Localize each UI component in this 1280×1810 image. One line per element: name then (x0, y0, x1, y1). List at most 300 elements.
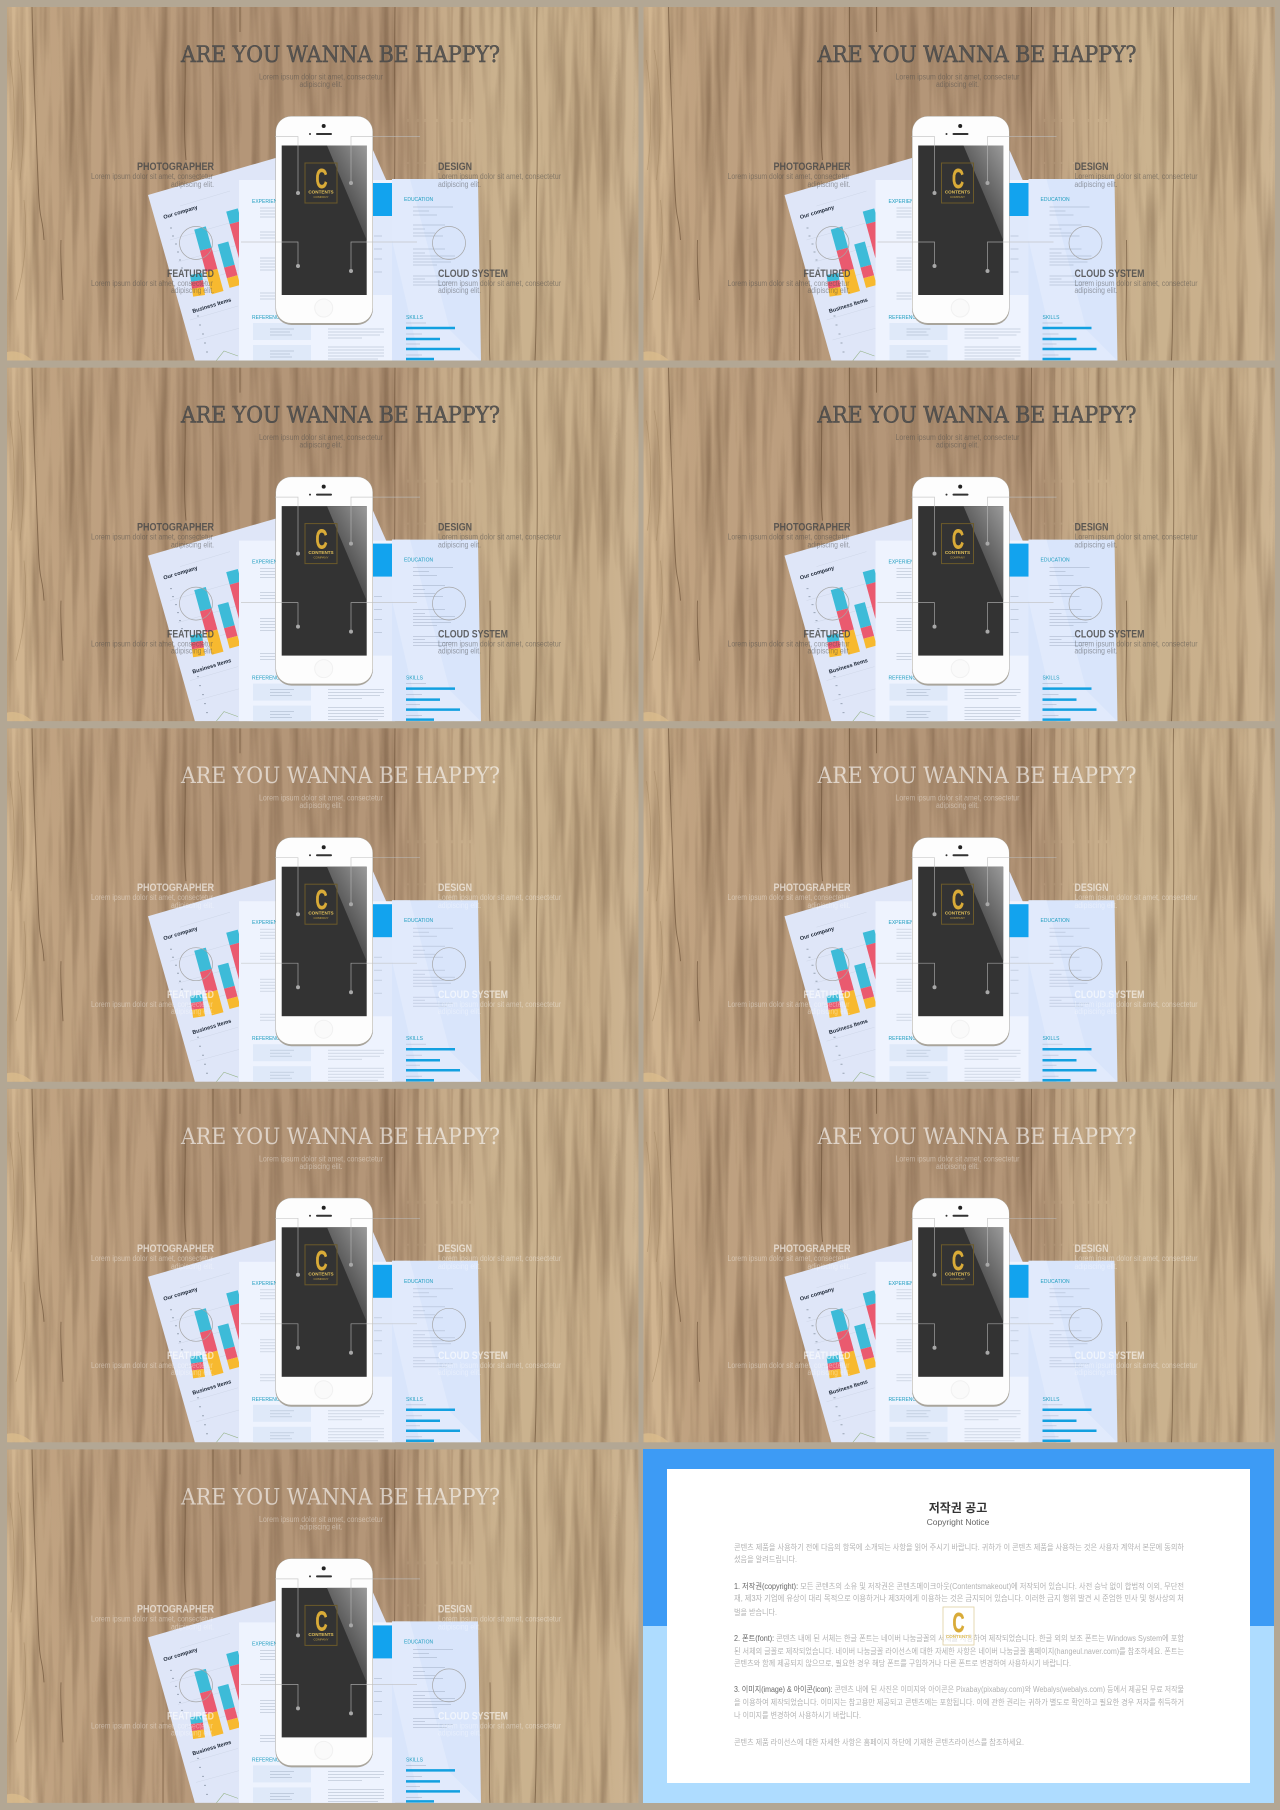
block: design: DESIGN (438, 161, 472, 173)
block: photographer: PHOTOGRAPHER (774, 882, 851, 894)
paper headings: REFERENCES (252, 1397, 287, 1403)
subtitle: Lorem ipsum dolor sit amet, consectetur (896, 72, 1020, 82)
wood background (7, 1089, 639, 1443)
block: cloud system: Lorem ipsum dolor sit amet, consectetur (438, 279, 561, 288)
block: design (438, 161, 561, 189)
phone logo: C (952, 524, 964, 555)
block: photographer: Lorem ipsum dolor sit amet, consectetur (91, 533, 213, 542)
phone logo: CONTENTS (945, 190, 970, 194)
phone (912, 837, 1010, 1046)
block: photographer (728, 522, 851, 550)
paper headings: REFERENCES (252, 1757, 287, 1763)
block: cloud system: adipiscing elit. (1074, 647, 1118, 656)
block: photographer: Lorem ipsum dolor sit amet, consectetur (91, 1614, 213, 1623)
phone logo: CONTENTS (308, 190, 334, 194)
block: featured: adipiscing elit. (808, 1007, 850, 1016)
title: ARE YOU WANNA BE HAPPY? (817, 764, 1136, 789)
section 2 font: 2. 폰트(font): 콘텐츠 내에 된 서체는 한글 폰트는 네이버 나눔글꼴의 서체를 사용하여 제작되었습니다. 한글 외의 보조 폰트는 Windows System에 포함 (734, 1633, 1185, 1643)
block: featured: FEATURED (167, 989, 214, 1001)
paper headings: EXPERIENCE (252, 920, 285, 926)
block: design (1074, 882, 1198, 910)
paper documents (148, 1574, 481, 1803)
block: cloud system: CLOUD SYSTEM (438, 629, 508, 641)
paper headings (163, 918, 433, 1042)
phone logo (305, 1245, 337, 1285)
title: ARE YOU WANNA BE HAPPY? (817, 404, 1136, 429)
subtitle: adipiscing elit. (300, 80, 342, 89)
section 1 copyright: 재, 제3자 기업에 유상이 대리 목적으로 이용하거나 제3자에게 이용하는 것은 금지되어 있습니다. 이러한 금지 행위 발견 시 준엄한 민사 및 형사상의 처 (734, 1593, 1184, 1603)
block: photographer (728, 1243, 851, 1271)
block: design: DESIGN (438, 882, 472, 894)
block: cloud system: CLOUD SYSTEM (1074, 268, 1144, 280)
title: ARE YOU WANNA BE HAPPY? (817, 43, 1136, 68)
phone logo: C (952, 163, 964, 194)
block: cloud system: CLOUD SYSTEM (438, 1350, 508, 1362)
block: design: DESIGN (1074, 882, 1109, 894)
block: featured: adipiscing elit. (171, 647, 214, 656)
block: featured: adipiscing elit. (808, 1368, 850, 1377)
block: featured: Lorem ipsum dolor sit amet, consectetur (91, 1000, 213, 1009)
phone logo: COMPANY (950, 195, 965, 199)
block: design: adipiscing elit. (438, 1622, 481, 1631)
phone logo: C (952, 1245, 964, 1276)
subtitle: Lorem ipsum dolor sit amet, consectetur (896, 794, 1020, 803)
phone logo: CONTENTS (308, 550, 334, 555)
phone logo: CONTENTS (945, 911, 970, 916)
phone logo: CONTENTS (945, 550, 970, 555)
subtitle: Lorem ipsum dolor sit amet, consectetur (259, 433, 383, 442)
block: cloud system (1074, 629, 1198, 656)
block: cloud system: adipiscing elit. (438, 1368, 481, 1377)
paper documents (784, 1214, 1118, 1443)
title: ARE YOU WANNA BE HAPPY? (180, 1485, 500, 1510)
paper headings: EXPERIENCE (252, 199, 285, 205)
section 3 image and icon: 나 이미지를 변경하여 사용하시기 바랍니다. (734, 1710, 861, 1720)
wood background (644, 7, 1276, 361)
paper headings: EXPERIENCE (252, 560, 285, 566)
block: design (438, 1603, 561, 1631)
block: photographer: adipiscing elit. (808, 180, 850, 189)
block: featured: FEATURED (804, 268, 851, 280)
block: photographer: Lorem ipsum dolor sit amet, consectetur (728, 1254, 850, 1263)
connector lines (816, 497, 1102, 634)
block: featured: Lorem ipsum dolor sit amet, consectetur (91, 1361, 213, 1370)
paper headings: Our company (163, 565, 199, 582)
phone logo: COMPANY (950, 1277, 965, 1281)
block: featured: adipiscing elit. (171, 1368, 214, 1377)
phone logo: C (316, 884, 328, 915)
paper headings: SKILLS (406, 1036, 424, 1042)
block: photographer: PHOTOGRAPHER (137, 1603, 214, 1615)
block: cloud system (438, 1350, 561, 1377)
block: design: Lorem ipsum dolor sit amet, consectetur (1074, 533, 1198, 542)
subtitle: Lorem ipsum dolor sit amet, consectetur (259, 794, 383, 803)
slide 4: dark text phone slide (644, 368, 1276, 722)
block: design: DESIGN (438, 1603, 472, 1615)
watermark logo (943, 1607, 974, 1645)
phone (276, 116, 373, 325)
subtitle (259, 433, 383, 450)
phone logo (305, 884, 337, 924)
subtitle: adipiscing elit. (300, 801, 342, 810)
paper headings: SKILLS (406, 315, 424, 321)
block: featured: adipiscing elit. (171, 1007, 214, 1016)
subtitle (896, 794, 1020, 810)
block: design (1074, 161, 1198, 189)
block: photographer (728, 161, 851, 189)
paper headings: Our company (799, 1286, 836, 1303)
block: photographer (91, 161, 214, 189)
block: photographer (91, 522, 214, 550)
phone logo: COMPANY (950, 916, 965, 920)
block: photographer: Lorem ipsum dolor sit amet, consectetur (728, 172, 850, 181)
title: ARE YOU WANNA BE HAPPY? (180, 1125, 500, 1150)
section 3 image and icon: 을 이용하여 제작되었습니다. 이미지는 참고용만 제공되고 콘텐츠에는 포함됩니다. 이에 관한 권리는 귀하가 별도로 확인하고 필요한 경우 저자를 취득하거 (734, 1697, 1184, 1707)
paper headings: Business Items (192, 297, 232, 315)
paper headings: SKILLS (406, 1397, 424, 1403)
phone logo: CONTENTS (308, 911, 334, 916)
block: design: Lorem ipsum dolor sit amet, consectetur (1074, 1254, 1198, 1263)
wood background (644, 368, 1276, 722)
paper documents (148, 493, 481, 722)
phone logo: C (952, 884, 964, 915)
paper headings (163, 1279, 433, 1403)
paper headings: EDUCATION (1040, 558, 1070, 564)
block: photographer: adipiscing elit. (171, 1262, 214, 1271)
connector lines (180, 1218, 466, 1355)
block: cloud system: CLOUD SYSTEM (438, 1710, 508, 1722)
paper headings: REFERENCES (888, 676, 923, 682)
block: featured: Lorem ipsum dolor sit amet, consectetur (91, 640, 213, 649)
block: cloud system: adipiscing elit. (438, 1728, 481, 1737)
subtitle: adipiscing elit. (300, 441, 342, 450)
paper headings: EXPERIENCE (888, 1281, 921, 1287)
paper headings: Our company (799, 205, 836, 221)
subtitle (896, 1154, 1020, 1171)
block: cloud system (438, 1710, 561, 1737)
subtitle (896, 72, 1020, 89)
block: cloud system: Lorem ipsum dolor sit amet, consectetur (1074, 1000, 1198, 1009)
title: ARE YOU WANNA BE HAPPY? (180, 404, 500, 429)
block: design: adipiscing elit. (1074, 901, 1118, 910)
phone logo: COMPANY (314, 556, 328, 560)
paper headings: EDUCATION (404, 1279, 433, 1285)
title: ARE YOU WANNA BE HAPPY? (180, 764, 500, 789)
paper documents (784, 132, 1118, 361)
paper headings: Our company (799, 565, 836, 582)
wood background (7, 368, 639, 722)
paper documents (148, 1214, 481, 1443)
subtitle: adipiscing elit. (936, 80, 979, 89)
intro paragraph (734, 1542, 1185, 1564)
paper headings: Our company (163, 926, 199, 942)
block: featured: FEATURED (167, 268, 214, 280)
block: photographer: PHOTOGRAPHER (137, 1243, 214, 1255)
subtitle (259, 72, 383, 89)
paper headings: Business Items (828, 658, 869, 676)
subtitle (259, 794, 383, 810)
subtitle: adipiscing elit. (936, 801, 979, 810)
block: cloud system: Lorem ipsum dolor sit amet, consectetur (438, 640, 561, 649)
paper documents (784, 493, 1118, 722)
phone logo (305, 524, 337, 564)
paper headings: REFERENCES (252, 676, 287, 682)
block: design: DESIGN (438, 522, 472, 534)
phone logo: CONTENTS (945, 1271, 970, 1276)
subtitle (259, 1154, 383, 1171)
subtitle: Lorem ipsum dolor sit amet, consectetur (259, 1515, 383, 1524)
block: featured (728, 989, 851, 1016)
section 3 image and icon: 3. 이미지(image) & 아이콘(icon): 콘텐츠 내에 된 사진은 이미지와 아이콘은 Pixabay(pixabay.com)와 Webalys(webalys.com) 등에서 제공된 무료 저작물 (734, 1684, 1184, 1694)
block: photographer: PHOTOGRAPHER (137, 882, 214, 894)
block: design (1074, 522, 1198, 550)
paper headings (163, 558, 433, 682)
phone logo (305, 1605, 337, 1645)
block: featured: FEATURED (167, 629, 214, 641)
block: cloud system (1074, 268, 1198, 295)
block: photographer: Lorem ipsum dolor sit amet, consectetur (728, 893, 850, 902)
paper headings: SKILLS (406, 1757, 424, 1763)
block: cloud system (438, 268, 561, 295)
block: design: Lorem ipsum dolor sit amet, consectetur (1074, 172, 1198, 181)
copyright subheading: Copyright Notice (927, 1517, 990, 1527)
paper headings: EXPERIENCE (888, 920, 921, 926)
wood background (7, 1449, 639, 1803)
phone (276, 837, 373, 1046)
section 2 font: 된 서체의 글꼴로 제작되었습니다. 네이버 나눔글꼴 라이선스에 대한 자세한 사항은 네이버 나눔글꼴 홈페이지(hangeul.naver.com)를 참조하세요. 폰트는 (734, 1646, 1184, 1656)
block: cloud system (438, 629, 561, 656)
copyright heading: 저작권 공고 (929, 1500, 987, 1515)
phone logo (942, 1245, 974, 1285)
paper headings: EDUCATION (1040, 197, 1070, 203)
paper headings: SKILLS (1042, 676, 1060, 682)
block: photographer: adipiscing elit. (808, 901, 850, 910)
block: featured: Lorem ipsum dolor sit amet, consectetur (728, 1000, 850, 1009)
wood background (7, 728, 639, 1082)
block: photographer: adipiscing elit. (171, 541, 214, 550)
subtitle: Lorem ipsum dolor sit amet, consectetur (896, 1154, 1020, 1163)
phone (276, 477, 373, 686)
paper headings (163, 1639, 433, 1763)
paper headings: Our company (163, 1286, 199, 1303)
block: cloud system: adipiscing elit. (438, 286, 481, 295)
paper headings: EDUCATION (1040, 918, 1070, 924)
block: featured (728, 629, 851, 656)
paper headings: EXPERIENCE (252, 1281, 285, 1287)
phone logo (942, 163, 974, 203)
wood background (644, 728, 1276, 1082)
block: design (438, 522, 561, 550)
subtitle: adipiscing elit. (936, 441, 979, 450)
section 2 font: 콘텐츠와 함께 제공되지 않으므로, 필요한 경우 해당 폰트를 구입하거나 다른 폰트로 변경하여 사용하시기 바랍니다. (734, 1658, 1071, 1668)
paper headings: REFERENCES (252, 1036, 287, 1042)
connector lines (816, 136, 1102, 273)
paper headings: Our company (163, 205, 199, 221)
block: photographer: PHOTOGRAPHER (137, 161, 214, 173)
block: photographer: PHOTOGRAPHER (137, 522, 214, 534)
block: photographer: Lorem ipsum dolor sit amet, consectetur (728, 533, 850, 542)
white card (667, 1469, 1250, 1783)
block: photographer: Lorem ipsum dolor sit amet, consectetur (91, 1254, 213, 1263)
paper headings: EDUCATION (404, 558, 433, 564)
intro paragraph: 셨음을 알려드립니다. (734, 1554, 797, 1564)
block: design (1074, 1243, 1198, 1271)
subtitle (896, 433, 1020, 450)
block: design: Lorem ipsum dolor sit amet, consectetur (438, 533, 561, 542)
light blue lower band (643, 1626, 1274, 1803)
phone logo: C (316, 1605, 328, 1636)
block: cloud system: CLOUD SYSTEM (438, 989, 508, 1001)
paper headings: EDUCATION (404, 197, 433, 203)
block: design: Lorem ipsum dolor sit amet, consectetur (1074, 893, 1198, 902)
phone logo (942, 524, 974, 564)
block: cloud system: Lorem ipsum dolor sit amet, consectetur (438, 1361, 561, 1370)
title: ARE YOU WANNA BE HAPPY? (817, 1125, 1136, 1150)
block: photographer: PHOTOGRAPHER (774, 522, 851, 534)
block: featured: Lorem ipsum dolor sit amet, consectetur (91, 1721, 213, 1730)
block: featured (91, 1710, 214, 1737)
block: design: adipiscing elit. (438, 1262, 481, 1271)
block: cloud system: Lorem ipsum dolor sit amet, consectetur (1074, 279, 1198, 288)
block: featured: adipiscing elit. (171, 286, 214, 295)
block: featured (728, 268, 851, 295)
slide 3: dark text phone slide (7, 368, 639, 722)
block: cloud system (438, 989, 561, 1016)
phone logo: COMPANY (314, 916, 328, 920)
block: cloud system: CLOUD SYSTEM (1074, 1350, 1144, 1362)
block: featured (728, 1350, 851, 1377)
block: cloud system: Lorem ipsum dolor sit amet, consectetur (1074, 640, 1198, 649)
block: design: adipiscing elit. (438, 180, 481, 189)
block: photographer: PHOTOGRAPHER (774, 161, 851, 173)
paper headings: Business Items (828, 1019, 869, 1036)
block: photographer (728, 882, 851, 910)
paper headings: EDUCATION (1040, 1279, 1070, 1285)
paper headings (799, 558, 1070, 682)
block: photographer (91, 1243, 214, 1271)
phone logo: COMPANY (314, 1277, 328, 1281)
slide 6: light text phone slide (644, 728, 1276, 1082)
block: featured: FEATURED (167, 1350, 214, 1362)
watermark logo: C (952, 1607, 964, 1638)
phone (912, 477, 1010, 686)
block: featured: Lorem ipsum dolor sit amet, consectetur (728, 640, 850, 649)
block: design: Lorem ipsum dolor sit amet, consectetur (438, 893, 561, 902)
block: featured (91, 1350, 214, 1377)
phone (276, 1198, 373, 1407)
block: design (438, 1243, 561, 1271)
block: featured: Lorem ipsum dolor sit amet, consectetur (91, 279, 213, 288)
block: design: DESIGN (1074, 1243, 1109, 1255)
block: design (438, 882, 561, 910)
paper headings (799, 918, 1070, 1042)
connector lines (180, 136, 466, 273)
block: featured: Lorem ipsum dolor sit amet, consectetur (728, 1361, 850, 1370)
block: design: DESIGN (1074, 522, 1109, 534)
section 1 copyright (734, 1581, 1184, 1617)
block: photographer: adipiscing elit. (808, 1262, 850, 1271)
paper headings: SKILLS (1042, 315, 1060, 321)
block: design: adipiscing elit. (438, 901, 481, 910)
section 1 copyright: 벌을 받습니다. (734, 1607, 777, 1617)
block: featured: FEATURED (804, 629, 851, 641)
block: photographer: Lorem ipsum dolor sit amet, consectetur (91, 172, 213, 181)
block: cloud system: adipiscing elit. (1074, 1007, 1118, 1016)
subtitle: Lorem ipsum dolor sit amet, consectetur (259, 72, 383, 82)
slide 1: dark text phone slide (7, 7, 639, 361)
paper headings: Business Items (828, 1379, 869, 1397)
phone logo: C (316, 524, 328, 555)
paper headings: Business Items (192, 1740, 232, 1757)
block: cloud system: adipiscing elit. (438, 1007, 481, 1016)
section 2 font (734, 1633, 1185, 1668)
phone logo: COMPANY (314, 1637, 328, 1641)
phone logo: CONTENTS (308, 1271, 334, 1276)
block: cloud system: adipiscing elit. (1074, 1368, 1118, 1377)
block: cloud system: CLOUD SYSTEM (438, 268, 508, 280)
block: design: Lorem ipsum dolor sit amet, consectetur (438, 172, 561, 181)
paper documents (784, 853, 1118, 1082)
paper headings: Our company (163, 1647, 199, 1663)
block: cloud system: adipiscing elit. (438, 647, 481, 656)
connector lines (816, 858, 1102, 994)
paper documents (148, 132, 481, 361)
block: photographer (91, 1603, 214, 1631)
block: cloud system: Lorem ipsum dolor sit amet, consectetur (1074, 1361, 1198, 1370)
title: ARE YOU WANNA BE HAPPY? (180, 43, 500, 68)
paper headings: REFERENCES (888, 1397, 923, 1403)
block: photographer: Lorem ipsum dolor sit amet, consectetur (91, 893, 213, 902)
phone logo: C (316, 163, 328, 194)
connector lines (180, 497, 466, 634)
paper headings: EDUCATION (404, 918, 433, 924)
paper headings: REFERENCES (888, 1036, 923, 1042)
block: cloud system (1074, 989, 1198, 1016)
block: design: adipiscing elit. (1074, 1262, 1118, 1271)
closing line: 콘텐츠 제품 라이선스에 대한 자세한 사항은 홈페이지 하단에 기재한 콘텐츠라이선스를 참조하세요. (734, 1737, 1024, 1747)
watermark logo: CONTENTS (946, 1634, 971, 1639)
block: featured (91, 268, 214, 295)
block: featured: adipiscing elit. (808, 286, 850, 295)
block: design: adipiscing elit. (1074, 541, 1118, 550)
paper headings: SKILLS (1042, 1397, 1060, 1403)
block: cloud system: CLOUD SYSTEM (1074, 989, 1144, 1001)
block: design: Lorem ipsum dolor sit amet, consectetur (438, 1254, 561, 1263)
subtitle: Lorem ipsum dolor sit amet, consectetur (259, 1154, 383, 1163)
block: photographer: adipiscing elit. (808, 541, 850, 550)
phone (276, 1558, 373, 1767)
paper headings (163, 197, 433, 321)
block: featured (91, 629, 214, 656)
paper headings: Business Items (192, 658, 232, 676)
block: featured: adipiscing elit. (171, 1728, 214, 1737)
phone logo: COMPANY (314, 195, 328, 199)
block: cloud system: CLOUD SYSTEM (1074, 629, 1144, 641)
block: photographer (91, 882, 214, 910)
paper headings: Our company (799, 926, 836, 942)
block: featured: adipiscing elit. (808, 647, 850, 656)
block: cloud system (1074, 1350, 1198, 1377)
block: photographer: PHOTOGRAPHER (774, 1243, 851, 1255)
slide 8: light text phone slide (644, 1089, 1276, 1443)
phone logo (942, 884, 974, 924)
blue upper band (643, 1449, 1274, 1626)
block: featured: FEATURED (804, 1350, 851, 1362)
phone logo (305, 163, 337, 203)
subtitle: adipiscing elit. (300, 1162, 342, 1171)
paper headings: SKILLS (406, 676, 424, 682)
subtitle: adipiscing elit. (936, 1162, 979, 1171)
